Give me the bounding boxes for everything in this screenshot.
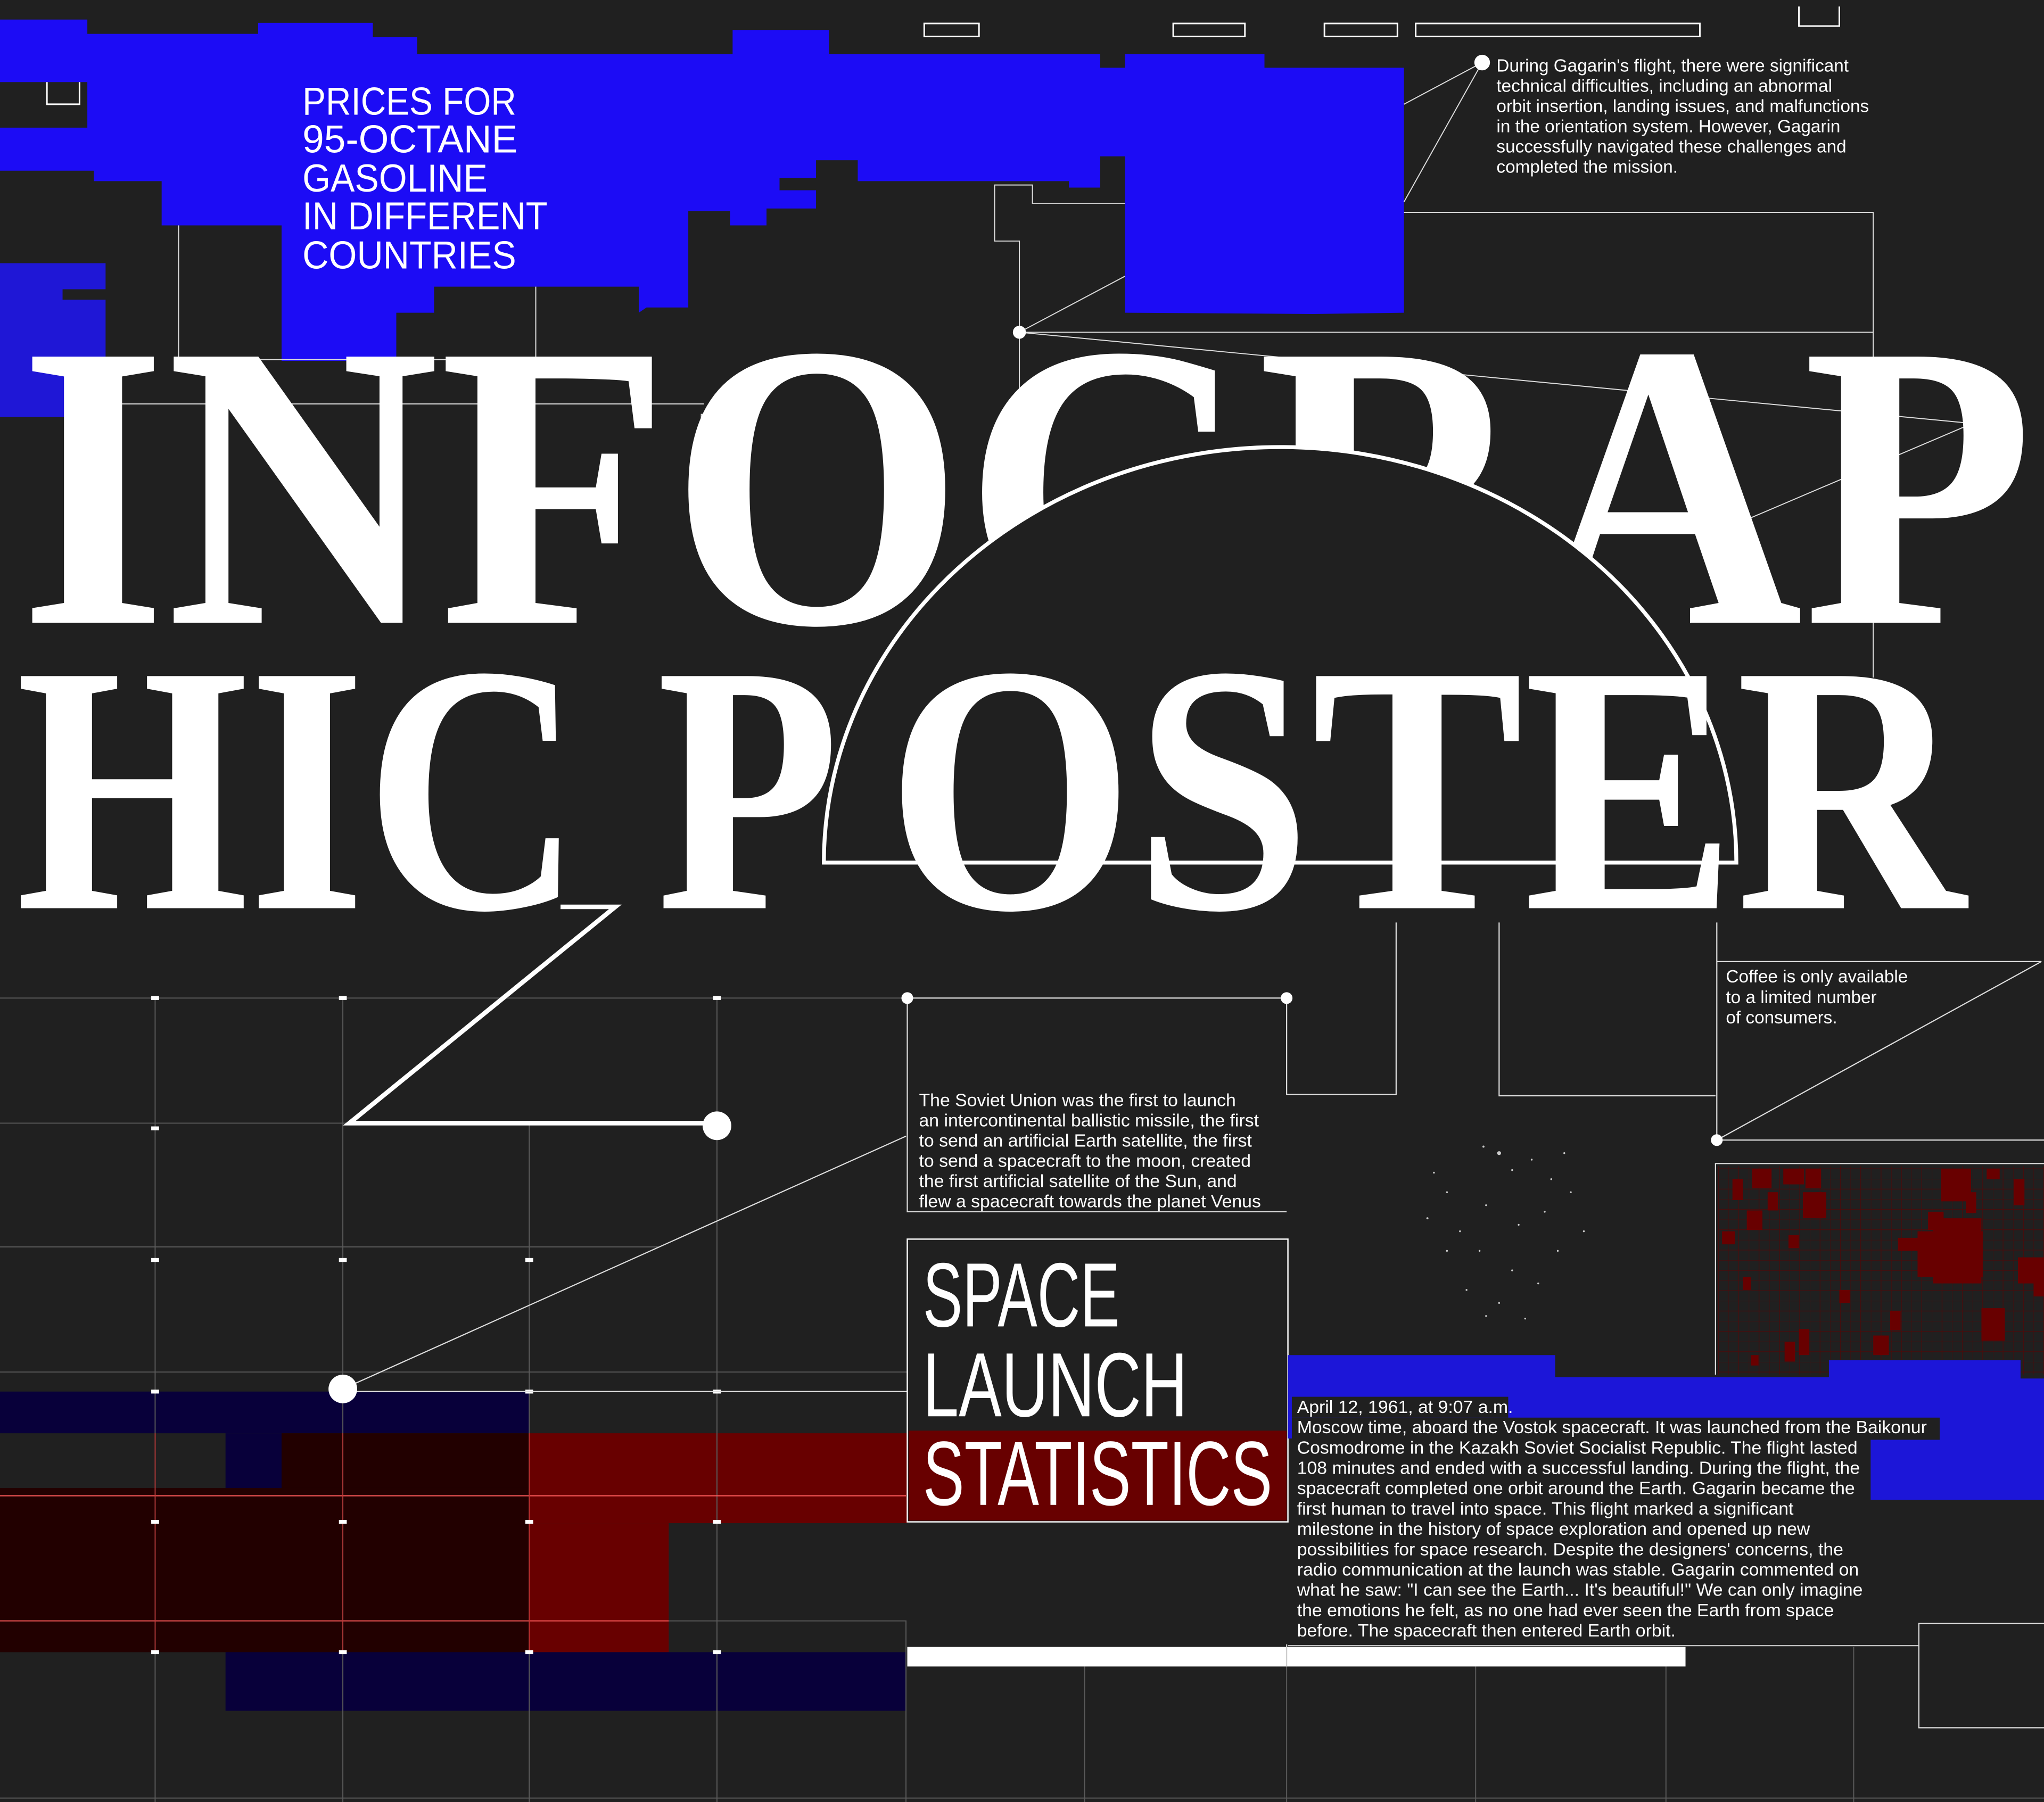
space launch statistics box: STATISTICS xyxy=(923,1423,1272,1525)
bottom-left color blocks xyxy=(0,1392,907,1711)
text: Soviet Union firsts: flew a spacecraft towards the planet Venus xyxy=(919,1191,1261,1211)
text: Soviet Union firsts xyxy=(919,1090,1261,1211)
text: Gagarin April 12 1961: what he saw: "I can see the Earth... It's beautiful!" We can only imagine xyxy=(1297,1580,1862,1600)
text: Gagarin April 12 1961: 108 minutes and ended with a successful landing. During the flight, the xyxy=(1297,1458,1860,1478)
text: Gagarin April 12 1961: milestone in the history of space exploration and opened up new xyxy=(1297,1519,1810,1539)
text: Soviet Union firsts: the first artificial satellite of the Sun, and xyxy=(919,1171,1237,1191)
heading: prices for gasoline xyxy=(302,79,548,277)
text: Gagarin April 12 1961: radio communication at the launch was stable. Gagarin commented on xyxy=(1297,1559,1859,1580)
text: Gagarin April 12 1961: spacecraft completed one orbit around the Earth. Gagarin became the xyxy=(1297,1478,1855,1499)
heading: prices for gasoline: PRICES FOR xyxy=(302,79,516,123)
text: coffee note: of consumers. xyxy=(1726,1008,1837,1028)
space launch statistics box xyxy=(907,1239,1288,1525)
blue shape bottom right xyxy=(1288,1355,2044,1500)
text: Soviet Union firsts: an intercontinental ballistic missile, the first xyxy=(919,1111,1259,1131)
heading: prices for gasoline: COUNTRIES xyxy=(302,233,516,277)
scatter dots xyxy=(1427,1146,1585,1319)
semicircle xyxy=(824,447,1736,863)
connector lines top xyxy=(107,63,1972,677)
text: Gagarin April 12 1961 xyxy=(1292,1397,1940,1641)
red mosaic panel xyxy=(1718,1166,2044,1375)
top small rectangles xyxy=(924,6,1840,37)
blue shape: left fragment xyxy=(0,263,105,417)
text: Gagarin flight difficulties: During Gagarin's flight, there were significant xyxy=(1496,56,1849,76)
blue shape: gasoline map xyxy=(0,20,1404,361)
text: coffee note: to a limited number xyxy=(1726,988,1877,1007)
text: Gagarin flight difficulties xyxy=(1496,56,1869,177)
text: Soviet Union firsts: to send an artificial Earth satellite, the first xyxy=(919,1131,1252,1151)
heading: prices for gasoline: GASOLINE xyxy=(302,156,488,200)
text: Gagarin flight difficulties: successfully navigated these challenges and xyxy=(1496,137,1847,156)
text: Gagarin April 12 1961: the emotions he felt, as no one had ever seen the Earth from space xyxy=(1297,1600,1834,1621)
text: Gagarin April 12 1961: first human to travel into space. This flight marked a significant xyxy=(1297,1499,1794,1519)
space launch statistics box: SPACE xyxy=(923,1244,1120,1346)
text: Gagarin flight difficulties: orbit insertion, landing issues, and malfunctions xyxy=(1496,97,1869,117)
text: Soviet Union firsts: to send a spacecraft to the moon, created xyxy=(919,1151,1251,1171)
title line 2 part 1: HIC P xyxy=(15,593,839,985)
bottom bar xyxy=(907,1624,2044,1727)
box lines right-middle xyxy=(907,922,2044,1375)
text: Gagarin April 12 1961: April 12, 1961, at 9:07 a.m. xyxy=(1297,1397,1513,1417)
text: Gagarin April 12 1961: before. The spacecraft then entered Earth orbit. xyxy=(1297,1621,1676,1641)
grid xyxy=(0,998,2044,1802)
small bracket top-left xyxy=(47,82,79,104)
heading: prices for gasoline: IN DIFFERENT xyxy=(302,194,548,238)
text: coffee note xyxy=(1726,967,1908,1028)
heading: prices for gasoline: 95-OCTANE xyxy=(302,117,517,161)
text: Gagarin April 12 1961: Cosmodrome in the Kazakh Soviet Socialist Republic. The flight lasted xyxy=(1297,1437,1858,1458)
text: coffee note: Coffee is only available xyxy=(1726,967,1908,987)
text: Gagarin April 12 1961: possibilities for space research. Despite the designers' concerns, the xyxy=(1297,1539,1843,1559)
grid ticks xyxy=(151,996,721,1654)
text: Gagarin flight difficulties: technical difficulties, including an abnormal xyxy=(1496,77,1832,96)
text: Gagarin April 12 1961: Moscow time, aboard the Vostok spacecraft. It was launched from the Baikonur xyxy=(1297,1417,1927,1437)
text: Soviet Union firsts: The Soviet Union was the first to launch xyxy=(919,1090,1236,1111)
text: Gagarin flight difficulties: completed the mission. xyxy=(1496,157,1678,177)
text: Gagarin flight difficulties: in the orientation system. However, Gagarin xyxy=(1496,117,1840,137)
space launch statistics box: LAUNCH xyxy=(923,1334,1188,1436)
connector: dot to soviet box xyxy=(328,1136,907,1403)
arrow: Z shape xyxy=(349,907,731,1140)
